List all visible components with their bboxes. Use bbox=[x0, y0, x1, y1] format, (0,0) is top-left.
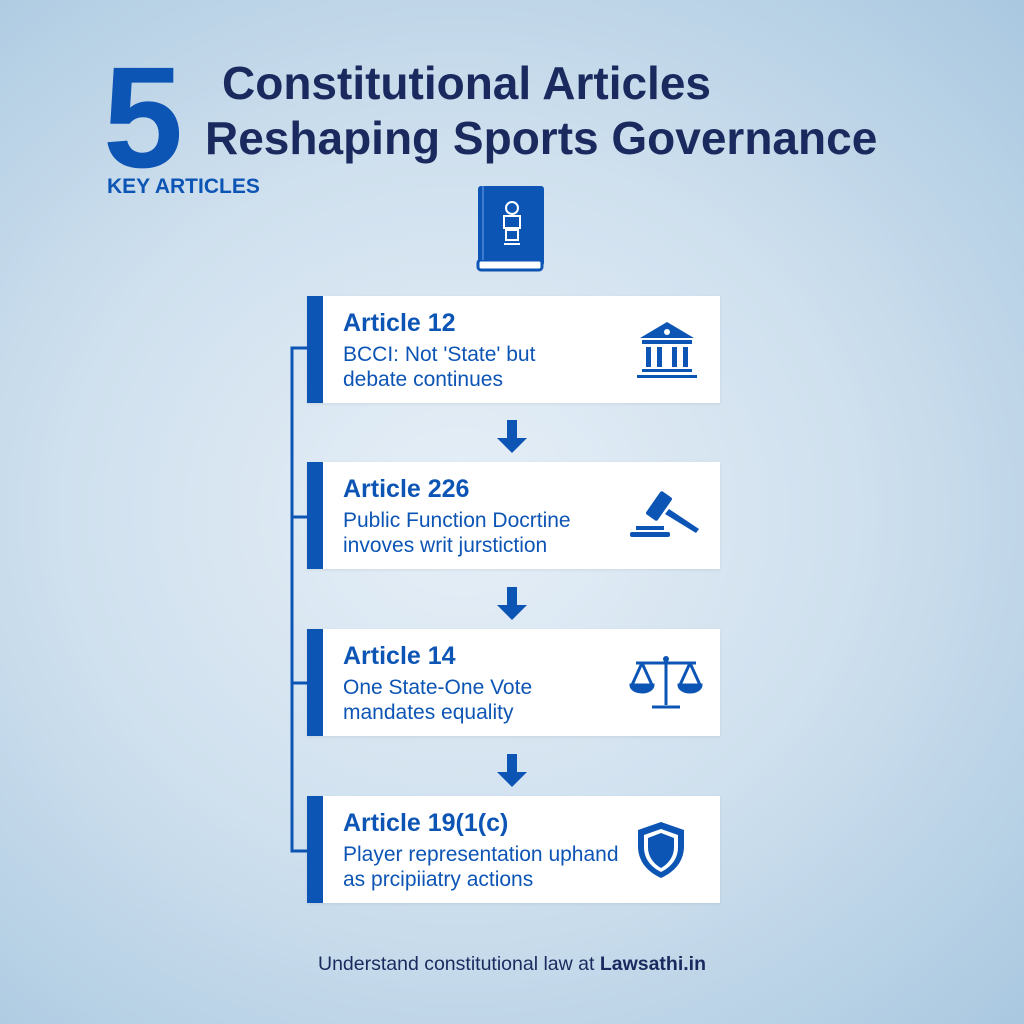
icon: government building bbox=[637, 322, 697, 378]
card: Article 226 bbox=[307, 462, 720, 569]
icon: gavel bbox=[630, 491, 699, 537]
title bbox=[205, 57, 877, 164]
icon: constitution book bbox=[476, 186, 544, 272]
arrow bbox=[497, 420, 527, 453]
card: Article 19(1)(c): as prcipiiatry actions bbox=[343, 868, 533, 891]
card: Article 226: Public Function Docrtine bbox=[343, 509, 571, 532]
card: Article 14: Article 14 bbox=[343, 642, 456, 670]
card: Article 19(1)(c): Article 19(1(c) bbox=[343, 809, 508, 837]
card: Article 14: mandates equality bbox=[343, 701, 513, 724]
title: Constitutional Articles bbox=[222, 57, 711, 109]
card: Article 12: debate continues bbox=[343, 368, 503, 391]
card: Article 14 bbox=[307, 629, 720, 736]
subtitle: key articles: KEY ARTICLES bbox=[107, 175, 260, 198]
big number 5: 5 bbox=[103, 37, 179, 198]
icon: scales bbox=[630, 656, 702, 708]
card: Article 12: BCCI: Not 'State' but bbox=[343, 343, 535, 366]
card: Article 12: Article 12 bbox=[343, 309, 456, 337]
arrow bbox=[497, 587, 527, 620]
card: Article 19(1)(c) bbox=[307, 796, 720, 903]
footer: Understand constitutional law at Lawsathi.in bbox=[318, 953, 706, 975]
bracket connector bbox=[290, 346, 307, 852]
card: Article 226: Article 226 bbox=[343, 475, 469, 503]
card: Article 19(1)(c): Player representation uphand bbox=[343, 843, 619, 866]
arrow bbox=[497, 754, 527, 787]
card: Article 14: One State-One Vote bbox=[343, 676, 532, 699]
card: Article 226: invoves writ jurstiction bbox=[343, 534, 547, 557]
card: Article 12 bbox=[307, 296, 720, 403]
title: Reshaping Sports Governance bbox=[205, 112, 877, 164]
icon: shield bbox=[638, 822, 684, 878]
